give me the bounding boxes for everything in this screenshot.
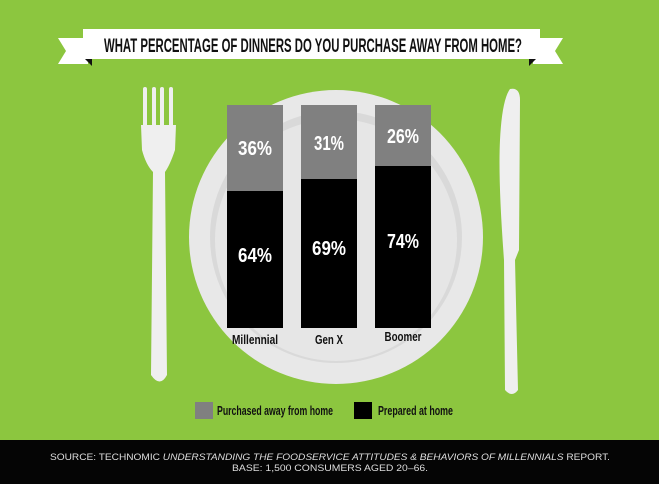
bar: Millennial: 36% bbox=[238, 138, 272, 160]
icon: knife bbox=[500, 89, 520, 394]
bar: Boomer: 74% bbox=[387, 231, 419, 253]
legend: Prepared at home bbox=[378, 403, 453, 418]
plate bbox=[189, 90, 483, 384]
bar: Millennial bbox=[227, 105, 283, 347]
footer source bbox=[0, 440, 659, 484]
bar: Boomer: 26% bbox=[387, 126, 419, 148]
footer source: BASE: 1,500 CONSUMERS AGED 20–66. bbox=[232, 463, 428, 473]
footer source: SOURCE: TECHNOMIC UNDERSTANDING THE FOODSERVICE ATTITUDES & BEHAVIORS OF MILLENNIALS REPORT. bbox=[50, 452, 610, 462]
bar: Gen X: 31% bbox=[314, 133, 344, 155]
legend bbox=[195, 402, 453, 419]
bar: Boomer: Boomer bbox=[384, 329, 422, 344]
title banner bbox=[58, 29, 563, 66]
bar: Millennial: 64% bbox=[238, 245, 272, 267]
bar: Gen X: 69% bbox=[312, 238, 346, 260]
bar: Gen X bbox=[301, 105, 357, 347]
bar chart bbox=[227, 105, 431, 347]
bar: Boomer bbox=[375, 105, 431, 344]
bar: Gen X: Gen X bbox=[315, 332, 343, 347]
icon: fork bbox=[141, 87, 176, 382]
legend: Purchased away from home bbox=[217, 403, 333, 418]
bar: Millennial: Millennial bbox=[232, 332, 278, 347]
